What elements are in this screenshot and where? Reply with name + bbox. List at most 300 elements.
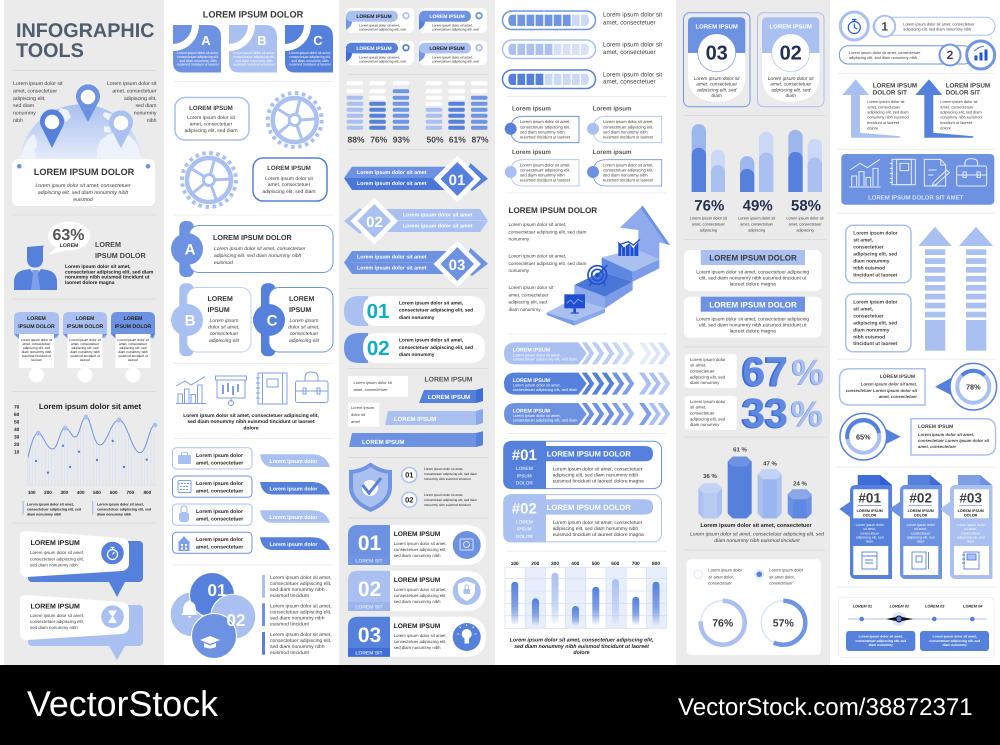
hash folder card 01: Lorem ipsum dolor bbox=[856, 523, 885, 527]
shield list: nonummy nibh euismod tincidunt bbox=[424, 503, 471, 507]
letter cards A B C: A bbox=[201, 33, 211, 48]
line chart: 20 bbox=[14, 442, 20, 448]
text box 1: sit amet, bbox=[853, 238, 874, 244]
step 1 with stopwatch bbox=[840, 12, 995, 40]
timeline panel: LOREM 01 bbox=[853, 604, 872, 608]
hexagon chart caption: diam nonummy nibh euismod tincidunt bbox=[714, 538, 800, 544]
number card 03: amet, consectetuer bbox=[696, 82, 737, 88]
three key cards: euismod tincidunt ut bbox=[118, 354, 148, 358]
gear box one: amet, consectetuer bbox=[190, 122, 233, 128]
text block: map left: Lorem ipsum dolor sit bbox=[13, 81, 63, 87]
column 1 bbox=[12, 20, 157, 660]
gauge callout 78 percent bbox=[840, 363, 997, 410]
progress bar 3: Lorem ipsum dolor sit bbox=[603, 71, 662, 78]
stat 33 percent: consectetuer bbox=[690, 410, 715, 416]
stat 33 percent: 33 bbox=[742, 390, 788, 436]
text box 2: adipiscing elit, sed bbox=[853, 321, 897, 327]
list row 2: Lorem ipsum dolor bbox=[196, 481, 243, 487]
text box 1: tincidunt ut laoreet bbox=[853, 272, 898, 278]
hash card 02: DOLOR bbox=[516, 534, 533, 539]
tile card 01: LOREM IPSUM bbox=[394, 531, 441, 538]
tile card 02 bbox=[348, 571, 486, 611]
progress bar 2: amet, consectetuer bbox=[603, 49, 656, 56]
line chart: Lorem ipsum dolor sit amet bbox=[39, 402, 142, 411]
person with speech bubble bbox=[14, 222, 90, 290]
info box 1: Lorem ipsum dolor sit amet, bbox=[520, 119, 571, 124]
gear box two bbox=[253, 158, 327, 201]
hexagonal column chart: 24 % bbox=[793, 480, 807, 487]
hash folder card 02: sit amet, bbox=[914, 527, 927, 531]
donut panel: consectetuer bbox=[708, 581, 732, 586]
letter cards A B C: B bbox=[257, 33, 267, 48]
tile card 01 bbox=[348, 525, 486, 565]
letter cards A B C: sed diam nonummy nibh bbox=[236, 59, 273, 63]
tab card B bbox=[171, 283, 251, 356]
diamond banner 01: 01 bbox=[449, 172, 465, 189]
hash folder card 01: LOREM IPSUM bbox=[857, 509, 883, 513]
hash folder card 01: sit amet, bbox=[863, 527, 876, 531]
icon: gear two bbox=[182, 153, 236, 207]
hexagonal column chart bbox=[698, 447, 812, 518]
ribbon steps: LOREM IPSUM bbox=[362, 439, 404, 446]
tile card 02: sed diam nonummy nibh bbox=[394, 599, 441, 604]
letter cards A B C: euismod tincidunt ut laoreet bbox=[177, 62, 219, 66]
callout: hourglass: LOREM IPSUM bbox=[30, 604, 80, 610]
info box 2: Lorem ipsum bbox=[593, 106, 632, 113]
icon row caption: dolore bbox=[243, 425, 259, 431]
hash folder card 03: consectetuer bbox=[961, 531, 981, 535]
tab card C bbox=[253, 283, 333, 356]
heading: LOREM IPSUM DOLOR bbox=[203, 10, 304, 20]
shield list: nonummy nibh euismod tincidunt bbox=[424, 477, 471, 481]
donut panel: sit amet dolor, bbox=[708, 574, 734, 579]
three key cards: laoreet bbox=[80, 358, 90, 362]
tag card 1: LOREM IPSUM bbox=[356, 14, 392, 20]
tab card strong bbox=[684, 297, 822, 338]
tile card 01: sed diam nonummy nibh bbox=[394, 553, 441, 558]
tile card 03: sed diam nonummy nibh bbox=[394, 645, 441, 650]
stairs heading and text: amet, consectetuer bbox=[508, 292, 549, 297]
text box 1: Lorem ipsum dolor bbox=[853, 231, 898, 237]
number pill 02: diam nonummy bbox=[399, 352, 435, 358]
ribbon steps: amet bbox=[351, 419, 361, 424]
chevron bar 1: LOREM IPSUM bbox=[513, 348, 551, 354]
shield list: 02 bbox=[405, 495, 413, 504]
letter cards A B C: Lorem ipsum dolor sit amet, bbox=[233, 51, 275, 55]
list row 4: amet, consectetuer bbox=[196, 544, 243, 550]
chevron bar 2: LOREM IPSUM bbox=[513, 378, 551, 384]
tab card strong: laoreet dolore magna bbox=[730, 328, 776, 334]
three key cards: laoreet bbox=[31, 358, 42, 362]
number card 03: Lorem ipsum dolor sit bbox=[694, 76, 740, 82]
tag card 1: consectetuer adipiscing elit, sed bbox=[359, 28, 406, 32]
footer bar bbox=[0, 665, 1000, 745]
text block: map left: amet, consectetuer bbox=[13, 88, 57, 94]
list row 3: Lorem ipsum dolor bbox=[270, 515, 317, 521]
gear box one: adipiscing elit, sed diam bbox=[184, 128, 238, 134]
tab card B: LOREM bbox=[208, 296, 233, 303]
tile card 03: 03 bbox=[358, 624, 381, 647]
capsule bar chart: Lorem ipsum dolor sit bbox=[690, 216, 728, 221]
step 1 with stopwatch: adipiscing elit, sed diam nonummy nibh bbox=[903, 27, 971, 32]
tile card 03: LOREM SIT bbox=[355, 650, 383, 656]
line chart: 40 bbox=[14, 427, 20, 433]
up arrow strong: tincidunt ut laoreet bbox=[940, 120, 973, 125]
text block: map right: sed diam bbox=[135, 103, 156, 109]
card: globe caption: euismod bbox=[73, 197, 94, 203]
number pill 01: consectetuer adipiscing elit, sed bbox=[399, 308, 473, 314]
diamond banner 01: Lorem ipsum dolor sit amet bbox=[357, 170, 427, 176]
chevron bar 2: consectetuer adipiscing elit, sed diam bbox=[513, 387, 577, 392]
letter cards A B C: euismod tincidunt ut laoreet bbox=[289, 62, 331, 66]
stat 67 percent: Lorem ipsum dolor bbox=[690, 357, 726, 362]
tile card 03: LOREM IPSUM bbox=[394, 623, 441, 630]
heading and text: person: IPSUM DOLOR bbox=[95, 251, 147, 260]
stat 67 percent: consectetuer bbox=[690, 368, 715, 374]
line chart: diam nonummy nibh bbox=[97, 512, 131, 516]
info box 3: sed diam nonummy nibh bbox=[520, 173, 565, 178]
tile card 02: 02 bbox=[358, 578, 381, 601]
text box 2: consectetuer bbox=[853, 314, 884, 320]
text box 2: Lorem ipsum dolor bbox=[853, 300, 898, 306]
hash folder card 02 bbox=[889, 475, 942, 579]
stat 33 percent: Lorem ipsum dolor bbox=[690, 399, 726, 404]
up arrow light: dolore bbox=[867, 125, 878, 130]
number pill 01: 01 bbox=[367, 300, 389, 323]
vertical bar chart: 100 bbox=[511, 561, 519, 567]
callout: stopwatch: consectetuer adipiscing elit, bbox=[30, 556, 84, 562]
up arrow light: amet, consectetuer bbox=[867, 104, 901, 109]
globe with map pins bbox=[20, 84, 142, 160]
info box 1: euismod tincidunt ut laoreet bbox=[520, 134, 571, 139]
tab card strong: LOREM IPSUM DOLOR bbox=[709, 300, 797, 310]
letter cards A B C: sed diam nonummy nibh bbox=[180, 59, 217, 63]
stairs heading and text: nonummy bbox=[508, 268, 530, 273]
hexagon chart caption: Lorem ipsum dolor sit amet, consectetuer bbox=[700, 522, 812, 529]
tile card 03: consectetuer adipiscing elit, bbox=[394, 639, 446, 644]
three key cards: amet, consectetuer bbox=[119, 342, 148, 346]
venn legend: Lorem ipsum dolor sit amet, bbox=[270, 575, 332, 581]
text box 2: tincidunt ut laoreet bbox=[853, 341, 898, 347]
timeline panel: consectetuer adipiscing elit, sed bbox=[855, 639, 906, 643]
chart caption: dolore bbox=[573, 650, 590, 656]
capsule bar chart: amet, consectetuer bbox=[788, 221, 822, 226]
column 2 bbox=[170, 10, 333, 658]
hash card 02: IPSUM bbox=[517, 527, 532, 532]
gauge callout 65 percent: Lorem ipsum dolor sit amet, bbox=[918, 432, 974, 437]
blue icon panel bbox=[841, 154, 994, 205]
three key cards: adipiscing elit, sed bbox=[120, 346, 147, 350]
list row 1: amet, consectetuer bbox=[196, 460, 243, 466]
gauge callout 65 percent bbox=[840, 413, 996, 460]
diamond banner 03: Lorem ipsum dolor sit amet bbox=[357, 254, 427, 260]
gear box one: Lorem ipsum dolor sit bbox=[187, 115, 236, 121]
number card 02 bbox=[758, 13, 824, 107]
up arrow light bbox=[842, 79, 917, 138]
hash folder card 03: diam bbox=[967, 539, 975, 543]
column 6 bbox=[838, 12, 997, 658]
text box 1: adipiscing elit, sed bbox=[853, 252, 897, 258]
chevron bar 1 bbox=[504, 342, 670, 364]
gauge callout 78 percent: 78% bbox=[966, 382, 981, 392]
tag card 3 bbox=[346, 41, 414, 65]
up arrow light: LOREM IPSUM bbox=[873, 82, 917, 89]
callout: stopwatch bbox=[20, 531, 143, 597]
stairs heading and text: nonummy bbox=[508, 237, 530, 242]
hash folder card 02: #02 bbox=[909, 490, 932, 505]
chevron bar 3 bbox=[504, 403, 670, 425]
venn legend bbox=[262, 575, 332, 656]
gauge callout 65 percent: LOREM IPSUM bbox=[918, 424, 953, 430]
three key cards: Lorem ipsum dolor sit bbox=[69, 338, 101, 342]
line chart: consectetuer adipiscing elit, sed bbox=[97, 508, 151, 512]
three key cards: adipiscing elit, sed bbox=[23, 346, 50, 350]
column 5 bbox=[684, 13, 825, 655]
tag card 4: Lorem ipsum dolor sit amet, bbox=[432, 56, 473, 60]
three key cards: IPSUM DOLOR bbox=[18, 324, 55, 330]
callout: stopwatch: LOREM IPSUM bbox=[30, 540, 80, 547]
tag card 4: LOREM IPSUM bbox=[429, 46, 465, 52]
callout: hourglass: consectetuer adipiscing elit, bbox=[30, 619, 84, 624]
diamond banner 03 bbox=[344, 240, 488, 288]
tab card B: adipiscing elit bbox=[209, 338, 240, 344]
stat 67 percent: 67 bbox=[741, 349, 787, 395]
info box 2: euismod tincidunt ut laoreet bbox=[603, 134, 654, 139]
info box 4: Lorem ipsum dolor sit amet, bbox=[603, 162, 654, 167]
tab card C: dolor sit amet, bbox=[288, 325, 320, 331]
stat 33 percent: adipiscing elit, sed bbox=[690, 416, 726, 422]
stat 33 percent bbox=[685, 390, 823, 436]
number pill 02: Lorem ipsum dolor sit amet, bbox=[399, 338, 464, 344]
three key cards: IPSUM DOLOR bbox=[115, 324, 152, 330]
up arrow light: tincidunt ut laoreet bbox=[867, 120, 900, 125]
vertical bar chart: 200 bbox=[531, 561, 540, 567]
timeline panel bbox=[838, 598, 994, 658]
three key cards bbox=[14, 312, 155, 382]
venn diagram: 01 bbox=[208, 581, 226, 600]
vertical bar chart: 800 bbox=[652, 561, 660, 567]
shield list: Lorem ipsum dolor sit amet, bbox=[424, 493, 463, 497]
up arrow strong: DOLOR SIT bbox=[946, 90, 980, 97]
line chart: 400 bbox=[77, 490, 85, 495]
hash folder card 01: adipiscing elit, sed bbox=[856, 535, 884, 539]
chevron bar 1: consectetuer adipiscing elit, sed diam bbox=[513, 357, 577, 362]
footer bar: VectorStock.com/38872371 bbox=[678, 694, 973, 721]
timeline panel: diam nonummy bbox=[943, 643, 967, 647]
stat 67 percent: sit amet, bbox=[690, 362, 706, 368]
chevron bar 2: Lorem ipsum dolor sit amet, bbox=[513, 383, 561, 388]
list row 2: amet, consectetuer bbox=[196, 488, 243, 494]
tab card light: Lorem ipsum dolor sit amet, consectetuer adipiscing bbox=[696, 270, 809, 276]
hash card 01: #01 bbox=[512, 447, 537, 464]
heading and text: person: LOREM bbox=[95, 240, 121, 249]
hash folder card 01: consectetuer bbox=[860, 531, 880, 535]
up arrow strong bbox=[915, 79, 990, 138]
hash folder card 03: sit amet, bbox=[964, 527, 977, 531]
text block: map left: sed diam bbox=[13, 103, 34, 109]
progress bar 1 bbox=[502, 11, 662, 30]
hash card 01: adipiscing elit, sed diam nonummy nibh bbox=[553, 473, 638, 479]
text block: map left: adipiscing elit, bbox=[13, 96, 46, 102]
info box 3 bbox=[505, 149, 579, 186]
up arrow strong: adipiscing elit, sed diam bbox=[940, 110, 982, 115]
tile card 02: LOREM SIT bbox=[355, 604, 383, 610]
icon: gear one bbox=[268, 93, 322, 147]
striped up arrows bbox=[918, 227, 993, 351]
hash card 02: euismod tincidunt ut laoreet dolore magna bbox=[553, 532, 644, 538]
capsule bar chart: amet, consectetuer bbox=[740, 221, 774, 226]
progress bar 3 bbox=[502, 70, 662, 88]
line chart: 100 bbox=[28, 490, 36, 495]
ribbon steps: LOREM IPSUM bbox=[428, 394, 470, 401]
list row 1 bbox=[172, 448, 330, 469]
hash card 01: euismod tincidunt ut laoreet dolore magna bbox=[553, 479, 644, 485]
capsule bar chart: 76% bbox=[694, 197, 724, 214]
tab card C: C bbox=[267, 312, 278, 330]
diamond banner 03: 03 bbox=[449, 257, 465, 274]
hash folder card 02: adipiscing elit, sed bbox=[907, 535, 935, 539]
capsule bar chart: amet, consectetuer bbox=[692, 221, 726, 226]
tab card strong: elit, sed diam nonummy nibh euismod tincidunt ut bbox=[699, 322, 807, 328]
donut panel bbox=[687, 559, 821, 655]
ribbon steps: dolor sit bbox=[351, 412, 366, 417]
up arrow light: nonummy nibh euismod bbox=[867, 115, 909, 120]
up arrow strong: amet, consectetuer bbox=[940, 104, 974, 109]
tab card C: consectetuer bbox=[290, 331, 319, 337]
hash card 01 bbox=[503, 441, 662, 489]
tile card 03 bbox=[348, 617, 486, 657]
callout: hourglass: sed diam nonummy nibh bbox=[30, 625, 78, 630]
segmented level bars: 76% bbox=[370, 135, 388, 145]
chart caption: sed diam nonummy nibh euismod tincidunt ut laoreet bbox=[514, 644, 649, 650]
tab card A bbox=[171, 221, 333, 277]
tab card B: Lorem ipsum bbox=[210, 318, 238, 324]
segmented level bars bbox=[347, 81, 489, 145]
number card 03 bbox=[684, 13, 750, 107]
donut panel: Lorem ipsum dolor bbox=[769, 568, 804, 573]
ribbon steps bbox=[348, 376, 483, 447]
progress bar 1: Lorem ipsum dolor sit bbox=[603, 12, 662, 19]
tab card C: IPSUM bbox=[289, 307, 311, 314]
text box 1: consectetuer bbox=[853, 245, 884, 251]
capsule bar chart: adipiscing bbox=[796, 227, 814, 232]
chevron bar 1: Lorem ipsum dolor sit amet, bbox=[513, 352, 561, 357]
shield list: Lorem ipsum dolor sit amet, bbox=[424, 467, 463, 471]
tab card A: euismod bbox=[214, 260, 233, 266]
heading and text: person: consectetuer adipiscing elit, sed diam bbox=[65, 270, 154, 276]
person with speech bubble: LOREM bbox=[60, 243, 78, 249]
line chart: 600 bbox=[110, 490, 118, 495]
info box 4: sed diam nonummy nibh bbox=[603, 173, 648, 178]
card: globe caption: Lorem ipsum dolor sit amet, consectetuer bbox=[35, 183, 131, 189]
chevron bar 2 bbox=[504, 373, 670, 395]
stairs heading and text bbox=[508, 206, 597, 312]
number card 03: LOREM IPSUM bbox=[696, 23, 738, 30]
donut panel: sit amet dolor, bbox=[769, 574, 795, 579]
info box 1: sed diam nonummy nibh bbox=[520, 129, 565, 134]
list row 4: Lorem ipsum dolor bbox=[270, 542, 317, 548]
hash card 01: LOREM bbox=[516, 466, 533, 471]
info box 4: consectetuer adipiscing elit, bbox=[603, 168, 653, 173]
step 2 with chart: 2 bbox=[947, 48, 954, 62]
tile card 01: consectetuer adipiscing elit, bbox=[394, 547, 446, 552]
hexagon chart caption bbox=[690, 522, 824, 544]
ribbon steps: Lorem ipsum bbox=[351, 405, 375, 410]
progress bar 3: amet, consectetuer bbox=[603, 79, 656, 86]
title: INFOGRAPHIC bbox=[16, 20, 154, 42]
heading and text: person: laoreet dolore magna bbox=[65, 280, 115, 286]
text box 2 bbox=[846, 294, 911, 352]
up arrow light: adipiscing elit, sed diam bbox=[867, 110, 909, 115]
stat 67 percent bbox=[685, 348, 824, 395]
capsule bar chart: 49% bbox=[743, 197, 773, 214]
number card 02: amet, consectetuer bbox=[770, 82, 811, 88]
hash card 02: LOREM bbox=[516, 519, 533, 524]
segmented level bars: 87% bbox=[471, 135, 489, 145]
callout: hourglass bbox=[20, 595, 143, 660]
letter cards A B C: sed diam nonummy nibh bbox=[292, 59, 329, 63]
timeline panel: LOREM 02 bbox=[890, 604, 910, 608]
list row 3: Lorem ipsum dolor bbox=[196, 509, 243, 515]
number pill 02: consectetuer adipiscing elit, sed bbox=[399, 345, 473, 351]
step 2 with chart: Lorem ipsum dolor sit amet, consectetuer bbox=[849, 50, 921, 55]
line chart: 30 bbox=[14, 434, 20, 440]
diamond banner 02 bbox=[344, 198, 488, 244]
gear box one bbox=[175, 98, 249, 140]
up arrow strong: nonummy nibh euismod bbox=[940, 115, 982, 120]
list row 3 bbox=[172, 504, 330, 525]
hash folder card 02: consectetuer bbox=[911, 531, 931, 535]
text box 2: diam nonummy bbox=[853, 328, 890, 334]
timeline panel: diam nonummy bbox=[869, 643, 893, 647]
three key cards: euismod tincidunt ut bbox=[70, 354, 100, 358]
tab card C: Lorem ipsum bbox=[290, 318, 318, 324]
gear box two: amet, consectetuer bbox=[268, 182, 311, 188]
venn diagram: 02 bbox=[227, 611, 245, 630]
tab card A: adipiscing elit, sed diam nonummy nibh bbox=[214, 253, 301, 259]
text box 2: nibh euismod bbox=[853, 335, 885, 341]
tab card A: A bbox=[185, 242, 196, 258]
hash folder card 03: LOREM IPSUM bbox=[958, 509, 984, 513]
line chart: Lorem ipsum dolor sit amet, bbox=[97, 502, 144, 506]
tab card A: Lorem ipsum dolor sit amet, consectetuer bbox=[214, 246, 306, 252]
tab card C: adipiscing elit bbox=[289, 338, 320, 344]
hash folder card 02: DOLOR bbox=[914, 514, 928, 518]
gear box one: LOREM IPSUM bbox=[189, 105, 233, 112]
tab card B: IPSUM bbox=[208, 307, 230, 314]
tile card 02: Lorem ipsum dolor sit amet, bbox=[394, 587, 447, 592]
gear box two: adipiscing elit, sed diam bbox=[262, 189, 316, 195]
chevron bar 3: consectetuer adipiscing elit, sed diam bbox=[513, 417, 577, 422]
venn legend: sed diam nonummy nibh bbox=[270, 644, 325, 650]
capsule bar chart: Lorem ipsum dolor sit bbox=[738, 216, 776, 221]
line chart: 300 bbox=[60, 490, 69, 495]
letter cards A B C bbox=[173, 25, 333, 72]
gauge callout 78 percent: Lorem ipsum dolor sit amet, bbox=[861, 382, 917, 387]
diamond banner 01 bbox=[344, 156, 488, 202]
heading and text: person: nonummy nibh euismod tincidunt ut bbox=[65, 275, 150, 281]
step 1 with stopwatch: 1 bbox=[881, 20, 888, 34]
letter cards A B C: consectetuer adipiscing elit, bbox=[233, 55, 275, 59]
tab card B: dolor sit amet, bbox=[208, 325, 240, 331]
number pill 01: diam nonummy bbox=[399, 315, 435, 321]
list row 3: amet, consectetuer bbox=[196, 516, 243, 522]
gauge callout 78 percent: amet, consectetuer bbox=[879, 394, 917, 399]
heading and text: person: Lorem ipsum dolor sit amet, bbox=[65, 264, 131, 270]
gauge callout 78 percent: consectetuer Lorem ipsum dolor sit bbox=[846, 388, 918, 393]
vertical bar chart: 600 bbox=[611, 561, 620, 567]
shield list: consectetuer adipiscing elit, sed diam bbox=[424, 498, 477, 502]
